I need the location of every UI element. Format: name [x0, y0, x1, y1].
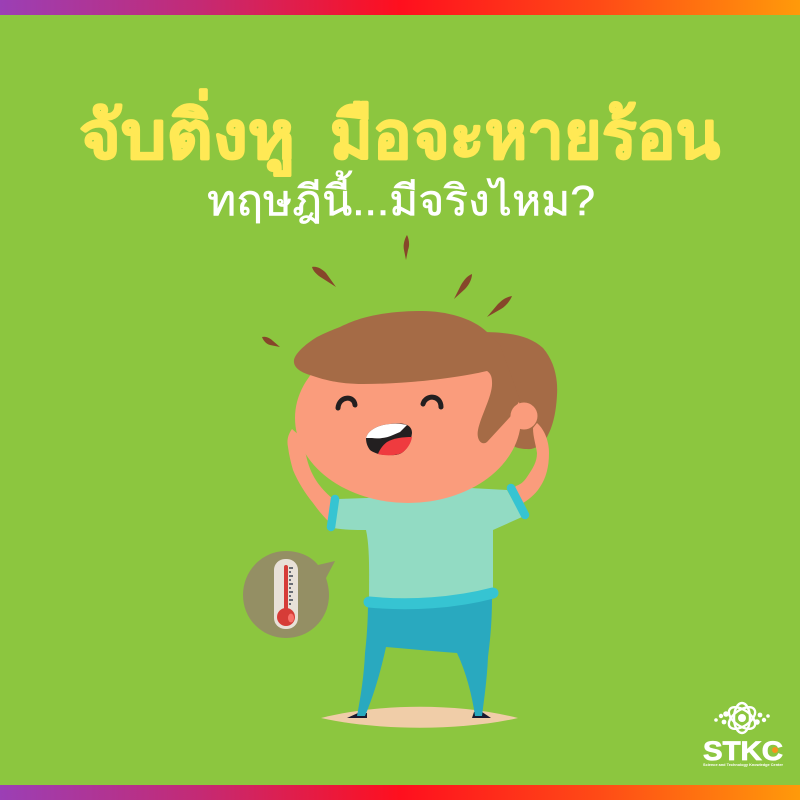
logo atom icon — [725, 703, 759, 733]
title — [79, 88, 720, 177]
thermometer speech bubble — [243, 551, 335, 638]
left sleeve cuff — [331, 499, 335, 527]
back hair — [480, 332, 557, 449]
bottom gradient bar — [0, 785, 800, 800]
right arm — [512, 423, 549, 505]
face — [295, 333, 521, 503]
logo dots — [714, 711, 770, 725]
title: จับติ่งหู — [79, 88, 295, 177]
boy character — [287, 311, 557, 718]
title: มือจะหายร้อน — [330, 98, 720, 172]
left eye — [338, 398, 355, 408]
trousers — [357, 596, 492, 716]
thermometer bulb — [277, 608, 295, 626]
top gradient bar — [0, 0, 800, 15]
hand on ear — [510, 402, 538, 430]
subtitle: ทฤษฎีนี้...มีจริงไหม? — [207, 170, 595, 224]
shoes — [347, 712, 491, 718]
logo wordmark: STKC — [703, 736, 783, 766]
STKC logo — [703, 703, 783, 767]
thermometer ticks — [289, 568, 293, 604]
right sleeve cuff — [511, 488, 525, 515]
bubble — [243, 551, 335, 638]
left arm — [287, 429, 345, 523]
logo tagline: Science and Technology Knowledge Center — [703, 762, 783, 767]
surprise marks above head — [262, 235, 512, 347]
t-shirt — [333, 488, 522, 600]
logo orange dot — [772, 747, 778, 753]
thermometer body — [274, 559, 298, 629]
waistband — [369, 593, 493, 604]
mercury — [284, 565, 288, 615]
mouth — [366, 423, 412, 455]
front hair — [294, 311, 520, 443]
right eye — [423, 397, 441, 407]
ground shadow — [321, 707, 518, 728]
